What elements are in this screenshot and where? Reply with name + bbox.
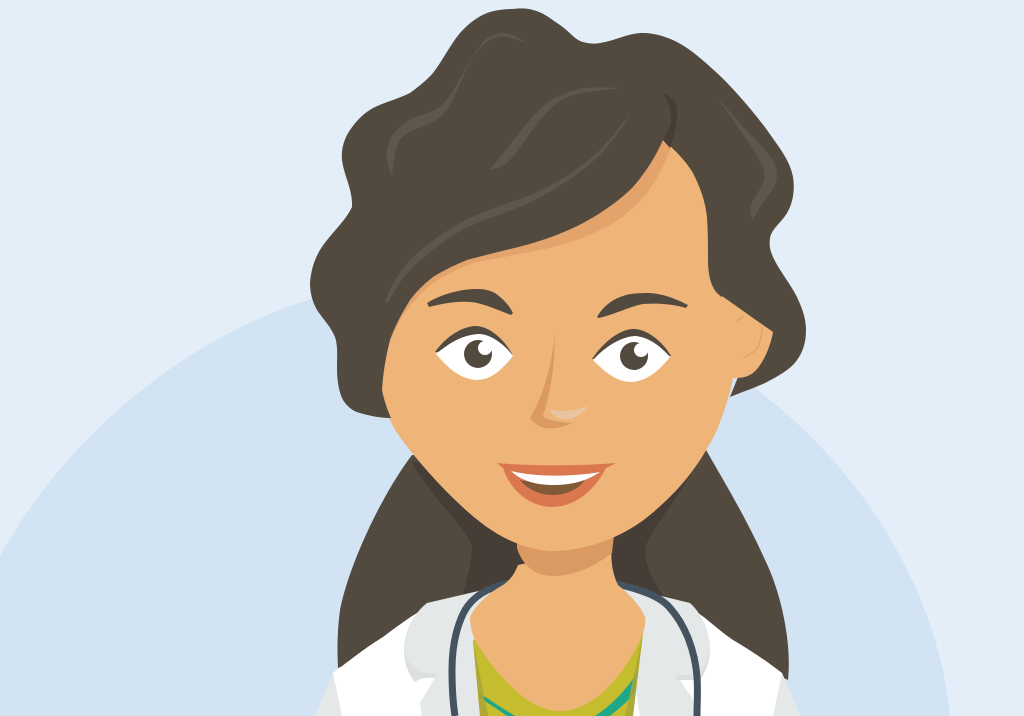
hair parting shade — [662, 92, 677, 148]
forehead shadow — [378, 135, 671, 395]
collar right — [620, 586, 710, 716]
shirt stripe right — [595, 673, 637, 716]
nose highlight — [549, 406, 588, 419]
right sleeve shade — [773, 673, 800, 716]
nose — [530, 334, 572, 428]
background circle — [0, 279, 950, 716]
front hair — [310, 8, 806, 418]
eye glint — [634, 343, 648, 357]
shirt stripe left — [479, 693, 515, 716]
neck and chest — [470, 545, 645, 711]
mouth interior — [520, 480, 585, 495]
left eye — [435, 326, 513, 380]
collar left shade — [404, 650, 436, 682]
lips — [497, 463, 616, 507]
green shirt — [473, 590, 643, 716]
teeth — [511, 471, 600, 485]
coat shoulders — [316, 586, 800, 716]
right eye — [592, 329, 671, 382]
hair highlights — [385, 33, 777, 303]
hair mass — [310, 8, 806, 418]
lab coat — [315, 586, 800, 716]
eyelid — [435, 326, 513, 356]
eye glint — [478, 341, 492, 355]
stethoscope — [452, 583, 697, 716]
left sleeve shade — [315, 673, 342, 716]
face — [378, 120, 745, 551]
collar right shade — [676, 650, 710, 680]
back hair — [338, 448, 789, 680]
mouth — [497, 463, 616, 507]
left eyebrow — [427, 289, 513, 315]
hair shadow behind neck — [412, 452, 702, 596]
eyelid — [592, 329, 671, 359]
shirt fold shades — [473, 633, 643, 716]
ear — [712, 296, 773, 378]
iris — [620, 342, 648, 370]
iris — [464, 340, 492, 368]
collar left — [404, 586, 500, 716]
eye white — [436, 334, 513, 380]
neck shadow — [517, 535, 614, 576]
ear detail — [737, 317, 762, 358]
eye white — [593, 336, 670, 382]
right eyebrow — [597, 293, 688, 318]
